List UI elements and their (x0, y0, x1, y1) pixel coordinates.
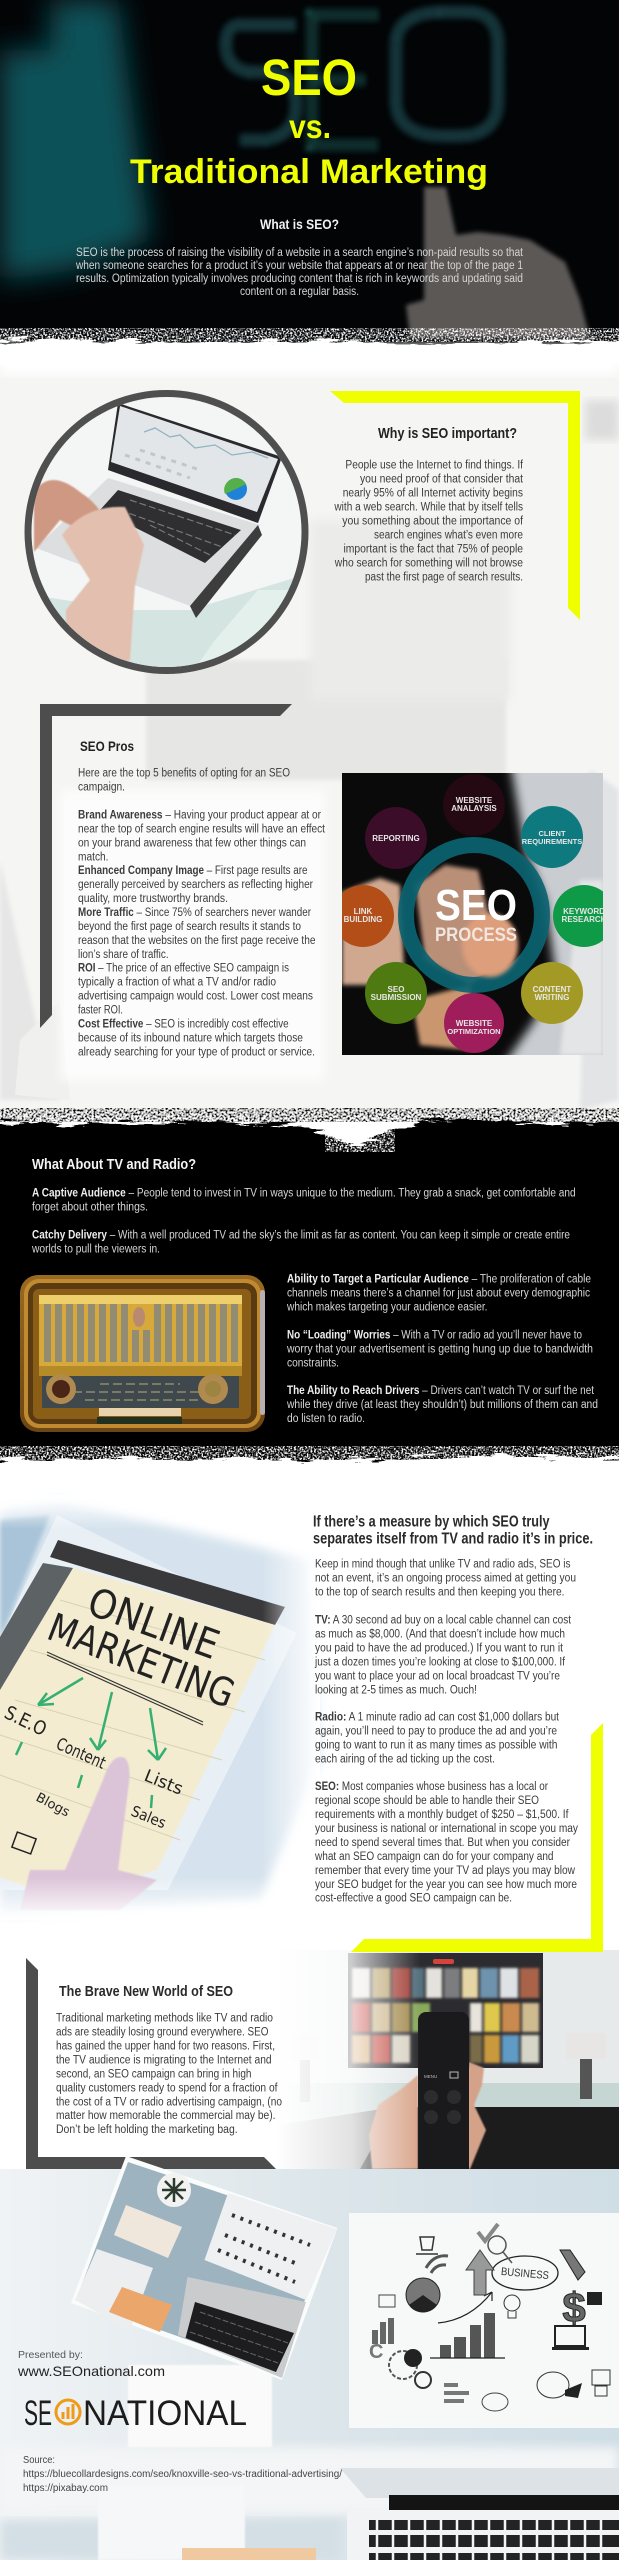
icon: envelope (379, 2295, 395, 2307)
icon: small bars (372, 2318, 394, 2344)
heading: SEO pros: SEO Pros (80, 738, 134, 754)
panel: hero (0, 0, 619, 350)
text: TV and radio benefits: do listen to radio. (287, 1413, 365, 1425)
text: why SEO important: People use the Internet to find things. If (345, 459, 524, 471)
text: price comparison: regional scope should be able to handle their SEO (315, 1795, 539, 1807)
text: why SEO important: you need proof of that consider that (360, 473, 524, 485)
circle: website optimization (444, 993, 504, 1053)
text: SEO pros: reason that the websites on the first page receive the (78, 935, 316, 947)
text: SEO pros: lion’s share of traffic. (78, 949, 169, 961)
circle: link building: LINK (354, 907, 373, 916)
circle: link building: BUILDING (344, 915, 382, 924)
dark bracket (40, 704, 292, 1028)
circle: website analysis (443, 774, 505, 836)
icon: business oval: BUSINESS (500, 2266, 549, 2282)
text: SEO pros: on your brand awareness that few other things can (78, 837, 306, 849)
remote control (418, 2012, 469, 2182)
heading: TV and radio: What About TV and Radio? (32, 1157, 196, 1173)
text: TV and radio benefits: No “Loading” Worries – With a TV or radio ad you’ll never have to (287, 1329, 582, 1341)
text: SEO pros: campaign. (78, 782, 125, 794)
heading: what is SEO: What is SEO? (260, 216, 339, 232)
circle: keyword research (553, 885, 603, 947)
text: price comparison: to the top of search results and then keeping you there. (315, 1587, 564, 1599)
panel: price comparison (0, 1495, 593, 1920)
text: SEO pros: Enhanced Company Image – First page results are (78, 865, 308, 877)
panel: TV and radio (0, 1108, 619, 1460)
torn edge: hero bottom (0, 339, 619, 365)
text: why SEO important: you something about the importance of (342, 515, 524, 527)
photo: SEO process diagram (342, 773, 603, 1055)
text: brave new world (56, 2013, 282, 2136)
heading: why SEO important: Why is SEO important? (378, 425, 517, 442)
circle: client requirements (521, 806, 583, 868)
text: online marketing handwriting (1, 1579, 241, 1832)
icon: light bulb (504, 2295, 520, 2318)
text: source: https://bluecollardesigns.com/seo/knoxville-seo-vs-traditional-advertising/ (23, 2469, 342, 2480)
finger (20, 1757, 157, 1910)
text: why SEO important (334, 459, 524, 583)
title: SEO (261, 49, 357, 106)
text: SEO pros: because of its inbound nature which targets those (78, 1032, 303, 1044)
remote control: MENU (424, 2074, 437, 2079)
text: brave new world: has gained the upper hand for two reasons. First, (56, 2041, 275, 2053)
text: SEO pros: beyond the first page of search results it stands to (78, 921, 301, 933)
circle: content writing: CONTENT (533, 985, 571, 994)
text: TV and radio benefits: Ability to Target a Particular Audience – The proliferation of cable (287, 1274, 591, 1286)
photo: online marketing tablet (0, 1495, 320, 1920)
dark bracket (26, 1958, 276, 2169)
grain: bottom edge light (0, 1446, 619, 1460)
logo: SEO National: NATIONAL (83, 2394, 247, 2433)
text: source: Source: (23, 2455, 55, 2466)
arrows: green (16, 1678, 166, 1808)
text: TV and radio benefits: worry that your advertisement is getting hung up due to bandwidth (286, 1343, 593, 1355)
text: SEO pros: ROI – The price of an effective SEO campaign is (78, 963, 289, 975)
text: price comparison: as much as $8,000. (And that doesn’t include how much (315, 1628, 565, 1640)
grain: top edge dark (0, 1108, 619, 1122)
circle: client requirements: REQUIREMENTS (522, 837, 582, 846)
circle: keyword research: KEYWORD (563, 907, 605, 916)
text: brave new world: matter how memorable the commercial may be). (56, 2110, 276, 2122)
icon: rocket (560, 2250, 585, 2280)
icon: gears (389, 2349, 431, 2388)
circle: website analysis: ANALAYSIS (451, 804, 497, 813)
text: why SEO important: who search for something will not browse (334, 557, 523, 569)
circle: reporting: REPORTING (372, 834, 420, 843)
text: what is SEO: results. Optimization typically involves producing content that is rich in keywords and updating said (76, 273, 523, 285)
title (130, 49, 488, 191)
hero photo: blurred SEO screen (0, 0, 590, 338)
icon: check mark (478, 2224, 498, 2241)
text: price comparison: you paid to have the ad produced.) If you want to run it (315, 1642, 564, 1654)
text: brave new world: Don’t be left holding the marketing bag. (56, 2124, 238, 2136)
text: price comparison: looking at 2-5 times as much. Ouch! (315, 1684, 477, 1696)
text: price comparison: your SEO budget for the year you can see how much more (315, 1879, 577, 1891)
text: SEO pros: quality, more trustworthy brands. (78, 893, 228, 905)
text: online marketing handwriting: Content (53, 1734, 109, 1774)
text: brave new world: ads are steadily losing ground everywhere. SEO (56, 2027, 269, 2039)
text: what is SEO: when someone searches for a product it’s your website that appears at or near the top of the page 1 (75, 260, 523, 272)
text: price comparison: what an SEO campaign can do for your company and (314, 1851, 554, 1863)
text: TV and radio benefits (286, 1274, 598, 1425)
icon: bar chart (440, 2313, 495, 2358)
circle: content writing: WRITING (535, 993, 569, 1002)
text: price comparison: Keep in mind though that unlike TV and radio ads, SEO is (315, 1559, 571, 1571)
icon: pie chart on screen (224, 478, 247, 500)
text: price comparison: your business is national or international in scope you may (315, 1823, 578, 1835)
text: price comparison: you want to place your ad on local broadcast TV you’re (315, 1670, 560, 1682)
text: SEO pros: typically a fraction of what a TV and/or radio (78, 977, 276, 989)
text: why SEO important: with a web search. While that by itself tells (334, 501, 523, 513)
text: presented by: Presented by: (18, 2350, 83, 2361)
heading: price comparison: If there’s a measure by which SEO truly (313, 1514, 550, 1531)
icon: pie chart (406, 2278, 440, 2312)
text: what is SEO: SEO is the process of raising the visibility of a website in a search engine’s non-paid results so that (76, 247, 524, 259)
text: brave new world: the TV audience is migrating to the Internet and (56, 2054, 272, 2066)
yellow bracket (351, 1723, 603, 1952)
hand holding remote (369, 2075, 418, 2169)
heading: price comparison (313, 1514, 593, 1547)
label: SEO process: SEO (435, 881, 517, 930)
text: online marketing handwriting: ONLINE (82, 1579, 225, 1669)
text: price comparison: again, you’ll need to pay to produce the ad and you’re (315, 1726, 557, 1738)
circle: SEO submission (365, 962, 427, 1024)
text: SEO pros: match. (78, 851, 108, 863)
icon: dollar: $ (562, 2284, 586, 2331)
panel: light section background (0, 345, 619, 1115)
text: brave new world: Traditional marketing methods like TV and radio (56, 2013, 273, 2025)
icon: piggy bank (482, 2393, 508, 2411)
text: SEO pros: advertising campaign would cost. Lower cost means (78, 991, 313, 1003)
title: Traditional Marketing (130, 153, 488, 191)
photo: vintage radio (20, 1275, 265, 1432)
text: SEO pros: Cost Effective – SEO is incredibly cost effective (78, 1018, 289, 1030)
text: price comparison: just a dozen times you’re looking at close to $100,000. If (314, 1656, 566, 1668)
text: TV and radio benefits: constraints. (287, 1357, 339, 1369)
circle: keyword research: RESEARCH (562, 915, 607, 924)
text: online marketing handwriting: Blogs (33, 1790, 72, 1821)
text: price comparison (314, 1559, 578, 1905)
text: why SEO important: important is the fact that 75% of people (344, 543, 523, 555)
icon: robot (592, 2370, 610, 2396)
circle: reporting (365, 807, 427, 869)
text: price comparison: not an event, it’s an ongoing process aimed at getting you (315, 1573, 576, 1585)
title: vs. (289, 108, 331, 145)
text: price comparison: going to want to run it as many times as possible with (315, 1740, 558, 1752)
text: online marketing handwriting: Sales (129, 1802, 169, 1832)
text: online marketing handwriting: Lists (141, 1766, 186, 1800)
icon: coffee cup (416, 2237, 438, 2254)
text: what is SEO (75, 247, 524, 298)
circle: website analysis: WEBSITE (456, 796, 493, 805)
text: price comparison: remember that every time your TV ad plays you may blow (315, 1865, 576, 1877)
text: SEO pros: generally perceived by searchers as reflecting higher (78, 879, 313, 891)
text: price comparison: need to spend several times that. But when you consider (315, 1837, 570, 1849)
text: source (23, 2455, 342, 2494)
text: SEO pros: Brand Awareness – Having your product appear at or (78, 809, 321, 821)
text: SEO pros: near the top of search engine results will have an effect (78, 823, 326, 835)
text: price comparison: each airing of the ad ticking up the cost. (315, 1754, 495, 1766)
panel: footer (0, 2156, 619, 2560)
text: online marketing handwriting: S.E.O (1, 1702, 50, 1741)
text: price comparison: TV: A 30 second ad buy on a local cable channel can cost (315, 1614, 572, 1626)
icon: wifi (426, 2256, 448, 2273)
text: SEO pros: already searching for your type of product or service. (78, 1046, 315, 1058)
icon: small lines (444, 2383, 469, 2403)
text: SEO pros: Here are the top 5 benefits of opting for an SEO (78, 768, 290, 780)
text: price comparison: requirements with a monthly budget of $250 – $1,500. If (315, 1809, 569, 1821)
text: what is SEO: content on a regular basis. (240, 286, 359, 298)
circle: content writing (521, 962, 583, 1024)
photo: sketched business paper (349, 2213, 619, 2428)
text: TV and radio intro: forget about other things. (32, 1202, 148, 1214)
text: website: www.SEOnational.com (17, 2363, 165, 2379)
panel: brave new world (26, 1723, 619, 2182)
circle: SEO submission: SEO (388, 985, 404, 994)
text: SEO pros: More Traffic – Since 75% of searchers never wander (78, 907, 311, 919)
logo: SEO National: SE (24, 2394, 52, 2433)
panel: SEO pros (40, 704, 619, 1070)
text: price comparison: cost-effective a good SEO campaign can be. (315, 1893, 512, 1905)
text: why SEO important: nearly 95% of all Internet activity begins (343, 487, 523, 499)
grain: hero edge (0, 328, 619, 342)
text: TV and radio benefits: The Ability to Reach Drivers – Drivers can’t watch TV or surf the net (287, 1385, 595, 1397)
icon: business oval (492, 2256, 558, 2290)
circle: link building (342, 885, 394, 947)
grain: top edge light (325, 1122, 395, 1152)
text: TV and radio intro (31, 1188, 576, 1256)
icon: magnifier (488, 2236, 512, 2263)
text: source: https://pixabay.com (23, 2483, 108, 2494)
text: brave new world: quality customers ready to spend for a fraction of (56, 2082, 278, 2094)
text: brave new world: the cost of a TV or radio advertising campaign, (no (56, 2096, 282, 2108)
yellow bracket (330, 391, 580, 620)
text: brave new world: second, an SEO campaign can bring in high (56, 2068, 252, 2080)
text: SEO pros: faster ROI. (78, 1005, 123, 1017)
photo: TV and remote (276, 1950, 619, 2182)
circle: website optimization: WEBSITE (456, 1019, 493, 1028)
photo: tilted desk (71, 2156, 338, 2380)
heading: brave new world: The Brave New World of SEO (59, 1983, 233, 2000)
text: SEO pros (78, 768, 326, 1058)
text: why SEO important: search engines what’s even more (374, 529, 523, 541)
text: price comparison: Radio: A 1 minute radio ad can cost $1,000 dollars but (315, 1712, 560, 1724)
text: online marketing handwriting: MARKETING (41, 1605, 241, 1718)
circle: SEO submission: SUBMISSION (371, 993, 422, 1002)
icon: speech bubble (537, 2372, 582, 2398)
text: price comparison: SEO: Most companies whose business has a local or (315, 1781, 548, 1793)
icon: letter C: C (369, 2341, 383, 2363)
text: TV and radio intro: worlds to pull the viewers in. (31, 1244, 160, 1256)
circle: client requirements: CLIENT (538, 829, 566, 838)
text: why SEO important: past the first page of search results. (365, 571, 523, 583)
photo: laptop in circle (24, 390, 308, 674)
photo: laptop keyboard (340, 2468, 619, 2560)
torn black band (0, 1118, 619, 1460)
panel: why SEO important (24, 390, 580, 674)
label: SEO process: PROCESS (435, 925, 517, 946)
icon: padlock (587, 2292, 602, 2305)
text: TV and radio benefits: which makes targeting your audience easier. (286, 1302, 488, 1314)
label: SEO process (436, 890, 516, 941)
icon: laptop (552, 2326, 589, 2350)
circle: website optimization: OPTIMIZATION (447, 1027, 501, 1036)
icon: up arrow (466, 2250, 494, 2295)
